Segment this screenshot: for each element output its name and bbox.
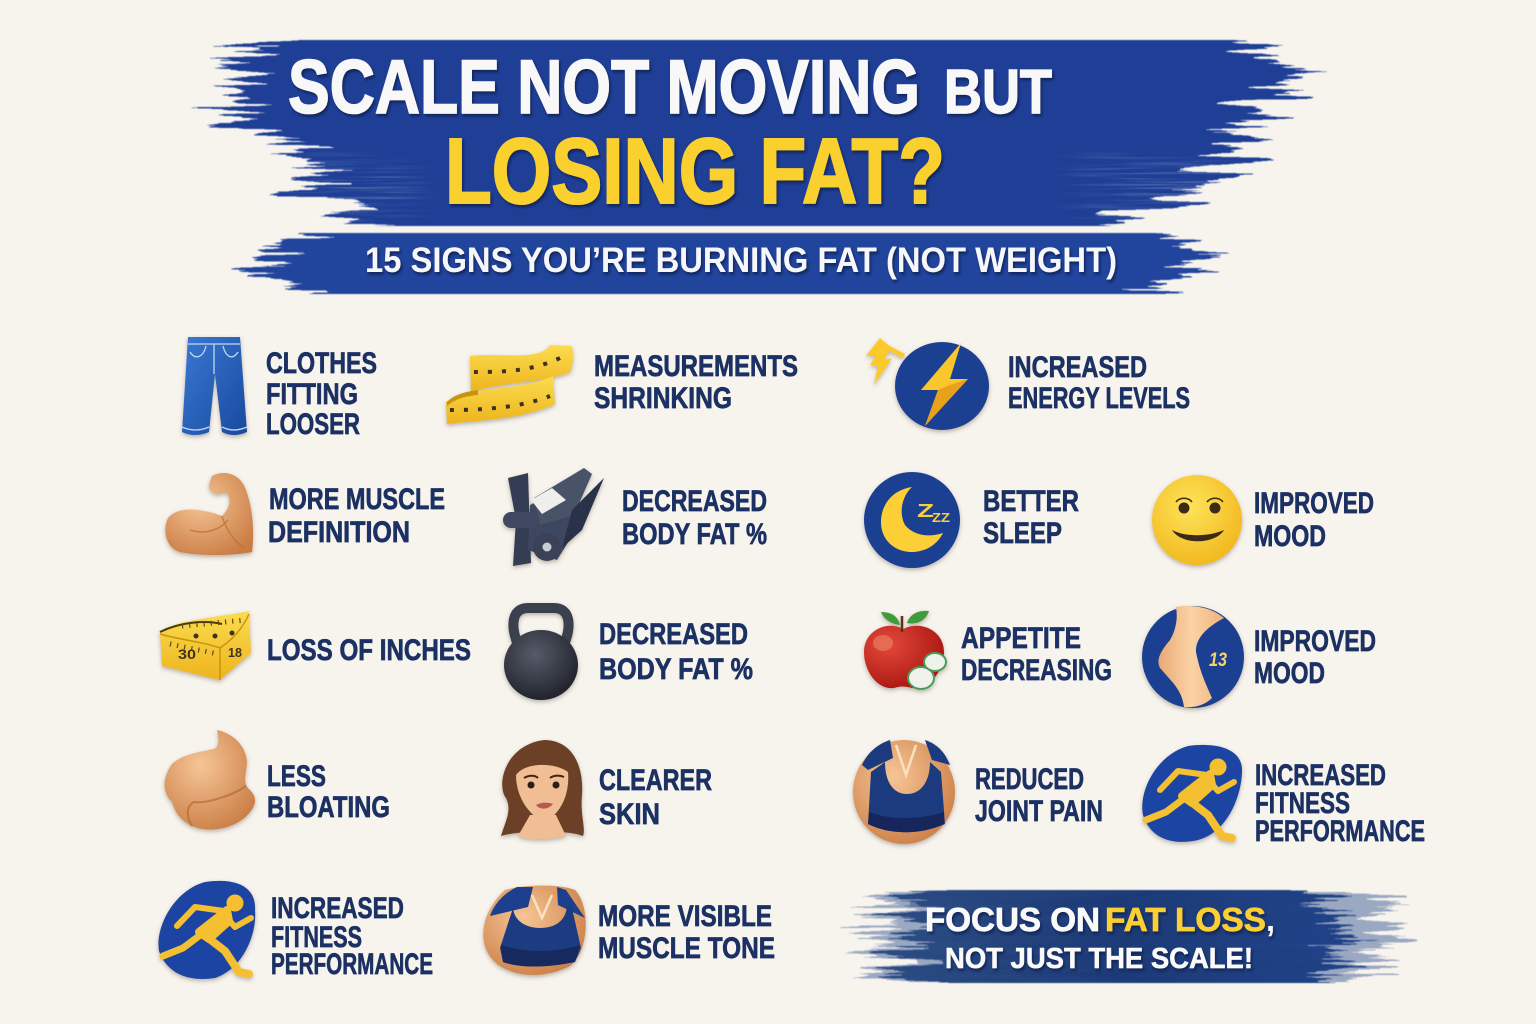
- label: [1254, 625, 1376, 690]
- icon: knee circle: 13: [1209, 650, 1227, 671]
- label: MORE VISIBLE: [598, 900, 772, 933]
- item: reduced joint pain: [853, 740, 1103, 844]
- item: increased energy levels: [866, 338, 1190, 430]
- title banner: blue brush stroke: [234, 40, 1300, 226]
- icon: woman's face: [501, 740, 584, 839]
- icon: body fat caliper: [503, 468, 604, 566]
- label: [961, 622, 1112, 687]
- callout text: NOT JUST THE SCALE!: [945, 943, 1253, 975]
- icon: moon circle: ZZ: [932, 510, 950, 525]
- label: [598, 900, 775, 965]
- label: MOOD: [1254, 520, 1326, 553]
- subtitle banner: blue brush stroke: [262, 233, 1205, 294]
- icon: moon circle: Z: [917, 501, 934, 521]
- label: [599, 764, 712, 831]
- item: clothes fitting looser: [182, 337, 377, 441]
- item: decreased body fat (caliper): [503, 468, 767, 566]
- label: CLOTHES: [266, 347, 377, 380]
- label: MORE MUSCLE: [269, 483, 445, 516]
- label: MOOD: [1254, 657, 1325, 690]
- label: FITTING: [266, 378, 358, 411]
- label: DECREASED: [599, 618, 748, 651]
- item: more muscle definition: [165, 473, 445, 555]
- title: BUT: [944, 58, 1052, 127]
- label: REDUCED: [975, 763, 1084, 796]
- label: JOINT PAIN: [975, 795, 1103, 828]
- callout: focus on fat loss: [872, 890, 1385, 983]
- label: BLOATING: [267, 791, 390, 824]
- label: INCREASED: [271, 892, 404, 925]
- icon: knee circle: [1142, 606, 1244, 708]
- icon: kettlebell: [504, 608, 578, 700]
- label: BODY FAT %: [622, 518, 767, 551]
- icon: torso with shoulder straps: [483, 886, 586, 975]
- item: clearer skin: [501, 740, 712, 839]
- label: MUSCLE TONE: [598, 932, 775, 965]
- title: SCALE NOT MOVING: [288, 45, 920, 130]
- icon: runner badge: [158, 881, 255, 979]
- label: ENERGY LEVELS: [1008, 382, 1190, 415]
- label: DECREASED: [622, 485, 767, 518]
- icon: smiley face: [1152, 475, 1242, 565]
- label: [975, 763, 1103, 828]
- item: improved mood: [1152, 475, 1374, 565]
- label: SHRINKING: [594, 382, 732, 415]
- callout text: ,: [1266, 901, 1275, 938]
- label: [983, 485, 1079, 550]
- item: better sleep: [864, 472, 1079, 568]
- icon: athletic torso: [853, 740, 955, 844]
- label: [622, 485, 767, 551]
- item: measurements shrinking: [446, 345, 798, 424]
- label: APPETITE: [961, 622, 1081, 655]
- item: more visible muscle tone: [483, 886, 775, 975]
- label: INCREASED: [1008, 351, 1147, 384]
- label: [1008, 351, 1190, 415]
- item: decreased body fat (kettlebell): [504, 608, 753, 700]
- label: LOSS OF INCHES: [267, 634, 471, 667]
- label: DECREASING: [961, 654, 1112, 687]
- label: SLEEP: [983, 517, 1062, 550]
- label: FITNESS: [271, 921, 362, 954]
- label: LESS: [267, 760, 326, 793]
- title: [288, 45, 1052, 223]
- callout text: FOCUS ON: [925, 901, 1100, 938]
- item: improved mood (knee): [1142, 606, 1376, 708]
- label: [271, 892, 433, 981]
- icon: measuring tape: [446, 345, 573, 424]
- label: [268, 483, 445, 549]
- title: LOSING FAT?: [445, 119, 945, 223]
- icon: curled measuring tape: 18: [228, 645, 242, 660]
- label: LOOSER: [266, 408, 360, 441]
- item: appetite decreasing: [864, 611, 1112, 689]
- label: SKIN: [599, 798, 660, 831]
- icon: apple: [864, 611, 946, 689]
- label: PERFORMANCE: [271, 948, 433, 981]
- label: FITNESS: [1255, 787, 1350, 820]
- icon: curled measuring tape: 30: [178, 646, 196, 662]
- subtitle: 15 SIGNS YOU’RE BURNING FAT (NOT WEIGHT): [365, 241, 1117, 280]
- item: increased fitness performance (right): [1142, 745, 1425, 848]
- label: [1255, 759, 1425, 848]
- icon: stomach: [164, 730, 255, 830]
- label: BODY FAT %: [599, 653, 753, 686]
- icon: flexed arm: [165, 473, 253, 555]
- callout brush background: [872, 890, 1385, 983]
- callout text: FAT LOSS: [1105, 901, 1266, 938]
- item: loss of inches: [160, 611, 471, 680]
- icon: jeans: [182, 337, 247, 435]
- label: [267, 760, 390, 824]
- label: CLEARER: [599, 764, 712, 797]
- item: increased fitness performance (left): [158, 881, 433, 981]
- icon: moon circle: [864, 472, 960, 568]
- label: [1254, 487, 1374, 553]
- label: [266, 347, 377, 441]
- icon: lightning circle: [866, 338, 989, 430]
- label: INCREASED: [1255, 759, 1386, 792]
- label: IMPROVED: [1254, 625, 1376, 658]
- callout text: [925, 901, 1275, 975]
- label: PERFORMANCE: [1255, 815, 1425, 848]
- icon: curled measuring tape: [160, 611, 251, 680]
- label: [599, 618, 753, 686]
- label: [594, 350, 798, 415]
- label: IMPROVED: [1254, 487, 1374, 520]
- icon: runner badge: [1142, 745, 1242, 842]
- label: DEFINITION: [268, 516, 410, 549]
- item: less bloating: [164, 730, 390, 830]
- label: MEASUREMENTS: [594, 350, 798, 383]
- label: BETTER: [983, 485, 1079, 518]
